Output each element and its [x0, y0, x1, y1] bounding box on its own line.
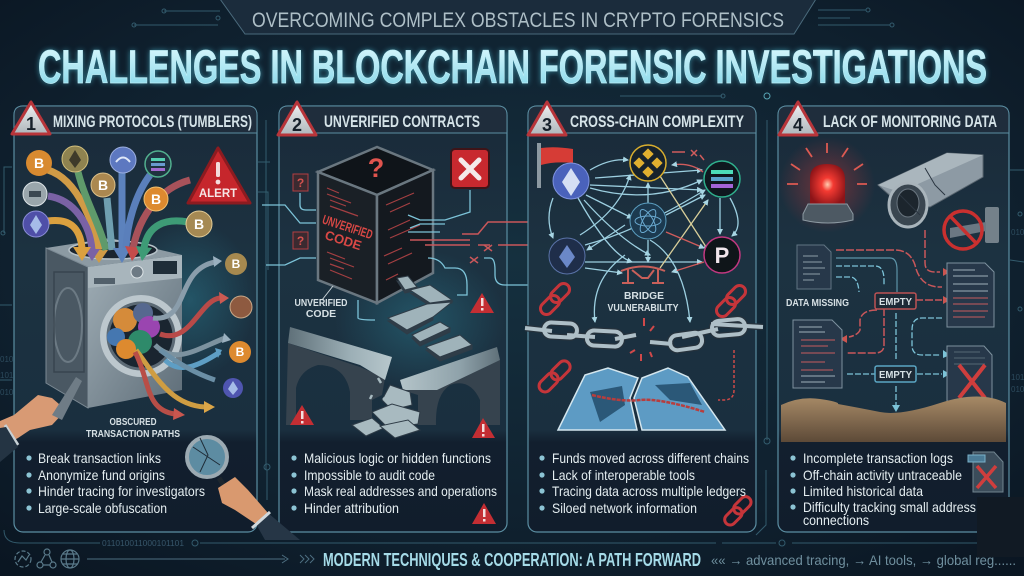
- surveillance camera: [878, 153, 999, 243]
- network links: [549, 160, 738, 322]
- panel 4 corner file icon: [968, 452, 1003, 492]
- empty label two: EMPTY: [879, 369, 912, 381]
- red x box: [451, 149, 489, 188]
- panel 1 badge: [12, 102, 50, 134]
- panel 2 teal glow: [335, 250, 505, 390]
- panel 4 bullets: Limited historical data: [803, 483, 923, 499]
- panel 3: cross-chain complexity: [525, 102, 763, 532]
- panel 2 bullets: Mask real addresses and operations: [304, 483, 497, 499]
- broken chain: [525, 319, 763, 351]
- panel 4 badge: [779, 102, 817, 135]
- faint binary background text: 010: [1011, 228, 1024, 237]
- panel 2 badge: 2: [292, 115, 302, 135]
- unverified code box: UNVERIFIED: [321, 212, 375, 242]
- panel 3 badge: [528, 102, 566, 135]
- footer binary text: 011010011000101101: [102, 539, 185, 548]
- code connector lines: [262, 190, 543, 320]
- panel 4 data flow lines: [836, 230, 950, 412]
- question mark tags: ?: [297, 176, 304, 190]
- masked corner: [977, 497, 1024, 557]
- panel 1 header: MIXING PROTOCOLS (TUMBLERS): [53, 113, 252, 131]
- chain nodes: P: [715, 243, 729, 268]
- panel 4 bullets: Incomplete transaction logs: [803, 450, 953, 466]
- output coins: [223, 253, 252, 398]
- unverified code box: ?: [368, 153, 384, 183]
- double-headed red arrow: [718, 350, 734, 400]
- panel 1 teal glow: [125, 220, 255, 380]
- panel 2 bullets: Impossible to audit code: [304, 467, 435, 483]
- faint binary background text: 010: [1011, 385, 1024, 394]
- faint binary background text: [0, 228, 1024, 397]
- panel 4 bullets: connections: [803, 512, 869, 528]
- flag: [537, 143, 573, 188]
- panel 2 bullets: [291, 450, 497, 516]
- panel 3 bullets: Siloed network information: [552, 500, 697, 516]
- output coins: B: [232, 257, 241, 271]
- question mark tags: [293, 174, 308, 249]
- panel 3 header: [528, 106, 756, 133]
- panel 4 frame: [778, 106, 1009, 532]
- input coins: B: [151, 191, 161, 207]
- panel 4: lack of monitoring data: [778, 102, 1009, 532]
- red x on top link: [672, 150, 704, 160]
- input coins: B: [34, 155, 44, 171]
- panel 1 bullets: Anonymize fund origins: [38, 467, 165, 483]
- coins inside drum: [107, 303, 160, 359]
- panel 2 frame: [279, 106, 507, 532]
- prohibited sign: [944, 211, 982, 249]
- panel 1 badge: 1: [26, 114, 36, 134]
- input coins: [23, 146, 212, 237]
- question mark tags: ?: [297, 234, 304, 248]
- faint binary background text: 101: [0, 371, 14, 380]
- panel 1: mixing protocols: [12, 102, 257, 532]
- panel 4 bullets: Off-chain activity untraceable: [803, 467, 962, 483]
- red broken links: [537, 281, 753, 527]
- data missing label: DATA MISSING: [786, 297, 849, 309]
- empty label one: EMPTY: [879, 296, 912, 308]
- input coin streams: [48, 170, 190, 263]
- bridge vulnerability: BRIDGE: [624, 290, 664, 302]
- panel 1 bullets: Large-scale obfuscation: [38, 500, 167, 516]
- broken stepping stones: [388, 276, 472, 361]
- panel 1 bullets: Break transaction links: [38, 450, 161, 466]
- panel 3 header: CROSS-CHAIN COMPLEXITY: [570, 113, 744, 131]
- panel 4 badge: 4: [793, 115, 803, 135]
- panel 2 header: [279, 106, 507, 133]
- subtitle banner: [220, 0, 816, 34]
- panel 3 frame: [528, 106, 756, 532]
- unverified code box: [316, 147, 433, 303]
- torn world map: [558, 368, 725, 430]
- alert triangle: [188, 148, 250, 203]
- warning triangles: [290, 293, 496, 524]
- document icons: [793, 245, 994, 401]
- faint binary background text: 010: [0, 355, 14, 364]
- footer bar: [15, 539, 1016, 570]
- magnifying glass with hand: [187, 437, 300, 540]
- chain nodes: [549, 145, 740, 274]
- panel 1 frame: [14, 106, 257, 532]
- panel 2 code label: CODE: [306, 308, 336, 320]
- panel 2 code label: [294, 286, 348, 320]
- panel 1 bullets: Hinder tracing for investigators: [38, 483, 205, 499]
- input coins: B: [98, 177, 108, 193]
- output coins: B: [236, 345, 245, 359]
- panel 3 badge: 3: [542, 115, 552, 135]
- panel 3 bullets: [539, 450, 749, 516]
- panel 2 badge: [278, 102, 316, 135]
- panel 1 header: [14, 106, 257, 133]
- footer icons: [15, 549, 79, 568]
- collapsed bridge: [286, 327, 500, 438]
- faint binary background text: 101: [1011, 373, 1024, 382]
- desert: [781, 396, 1006, 442]
- panel 4 header: [778, 106, 1009, 133]
- left hand holding tool: [0, 377, 82, 462]
- panel 2: unverified contracts: [262, 102, 543, 532]
- panel 2 bullets: Malicious logic or hidden functions: [304, 450, 491, 466]
- panel 1 bullets: [26, 450, 205, 516]
- panel 4 bullets: Difficulty tracking small address: [803, 499, 976, 515]
- faint binary background text: 010: [0, 388, 14, 397]
- panel 2 bullets: Hinder attribution: [304, 500, 399, 516]
- obscured paths label: OBSCURED: [110, 416, 157, 428]
- break sparks: [630, 318, 654, 361]
- red siren: [779, 137, 875, 233]
- alert triangle: ALERT: [199, 188, 237, 200]
- unverified code box: CODE: [323, 227, 364, 253]
- panel 3 bullets: Funds moved across different chains: [552, 450, 749, 466]
- input coins: B: [194, 216, 204, 232]
- empty label one: [875, 293, 916, 309]
- footer arrow: [87, 555, 314, 563]
- subtitle banner: OVERCOMING COMPLEX OBSTACLES IN CRYPTO FORENSICS: [252, 9, 784, 32]
- panel 2 header: UNVERIFIED CONTRACTS: [324, 113, 480, 131]
- washing machine: [46, 238, 182, 408]
- panel 2 code label: UNVERIFIED: [294, 297, 348, 309]
- panel 3 bullets: Tracing data across multiple ledgers: [552, 483, 746, 499]
- obscured paths label: [86, 416, 180, 440]
- panel 4 bullets: [790, 450, 976, 528]
- bridge vulnerability: [608, 266, 678, 314]
- footer heading: MODERN TECHNIQUES & COOPERATION: A PATH FORWARD: [323, 550, 701, 570]
- obscured paths label: TRANSACTION PATHS: [86, 428, 180, 440]
- bridge vulnerability: VULNERABILITY: [608, 302, 678, 314]
- output paths: [135, 256, 231, 420]
- empty label two: [875, 366, 916, 382]
- panel 3 bullets: Lack of interoperable tools: [552, 467, 695, 483]
